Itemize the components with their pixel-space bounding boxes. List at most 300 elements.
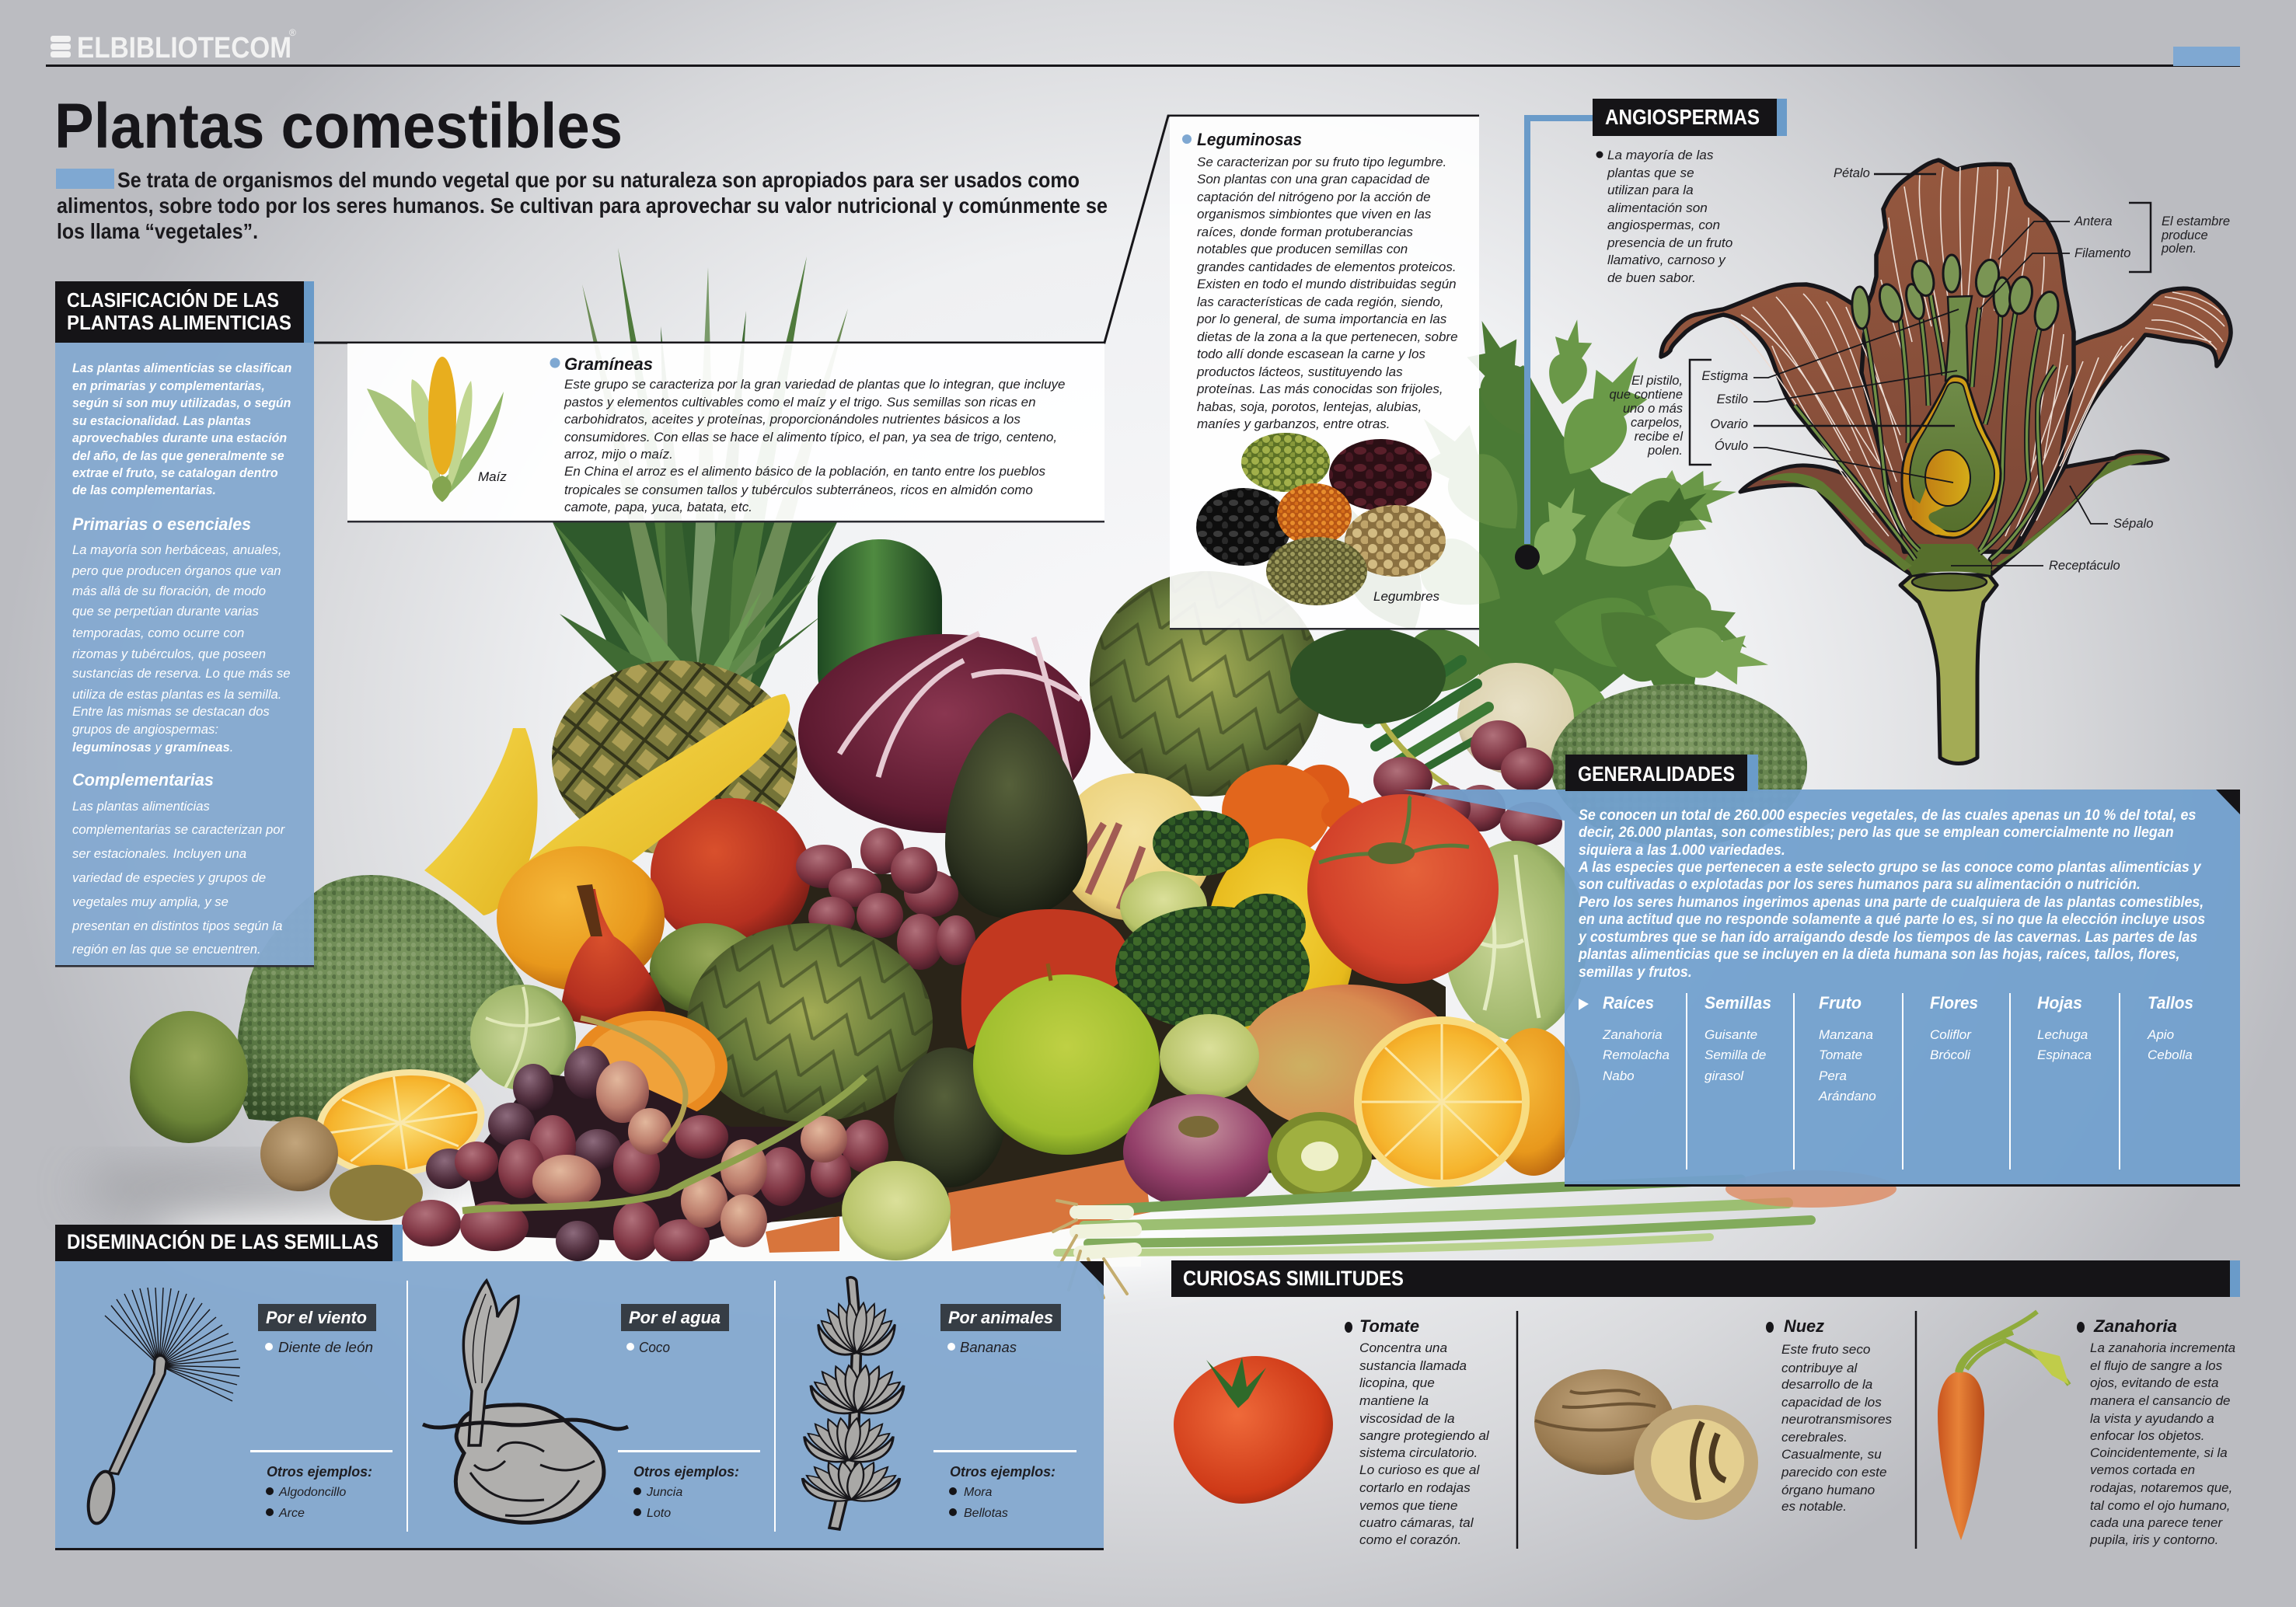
plant parts table: Zanahoria xyxy=(1602,1027,1663,1042)
anthers xyxy=(1851,255,2062,333)
header: angiospermas xyxy=(1593,99,1787,136)
panel: clasificación xyxy=(55,343,314,967)
brackets xyxy=(1690,203,2151,465)
bullet xyxy=(1182,134,1192,144)
tomatillo lower mid xyxy=(1160,1014,1259,1100)
icon: arrow xyxy=(1579,999,1589,1010)
flower labels: Sépalo xyxy=(2113,517,2153,531)
tomatillos upper xyxy=(1120,871,1207,943)
flower labels: recibe el xyxy=(1635,430,1684,444)
receptacle xyxy=(1904,544,1991,575)
flower labels: El estambre xyxy=(2162,214,2230,228)
floor glow xyxy=(78,1163,1244,1290)
angiospermas text: de buen sabor. xyxy=(1607,270,1696,285)
complementarias text: región en las que se encuentren. xyxy=(72,942,261,957)
generalidades text: decir, 26.000 plantas, son comestibles; pero las que se emplean comercialmente no llegan xyxy=(1579,823,2174,840)
pear xyxy=(560,884,667,1029)
leguminosas text: organismos simbiontes que viven en las xyxy=(1197,207,1432,221)
label: por el viento: Por el viento xyxy=(266,1308,367,1327)
leguminosas text: todo allí donde escasean la carne y los xyxy=(1197,347,1425,361)
nuez text: órgano humano xyxy=(1781,1483,1875,1497)
lower grape bunch xyxy=(402,1018,888,1263)
flower labels: Receptáculo xyxy=(2049,559,2120,573)
banana small xyxy=(424,728,538,915)
header: curiosas similitudes xyxy=(1171,1260,2240,1297)
header: angiospermas: ANGIOSPERMAS xyxy=(1605,105,1760,129)
leguminosas text: habas, soja, porotos, lentejas, alubias, xyxy=(1197,399,1422,414)
tomate text: Concentra una xyxy=(1359,1340,1447,1355)
leguminosas text: productos lácteos, sustituyendo las xyxy=(1196,364,1403,379)
generalidades text: A las especies que pertenecen a este selecto grupo se las conoce como plantas alimenticias y xyxy=(1578,858,2202,875)
generalidades text xyxy=(1578,806,2205,980)
plant parts table: Hojas xyxy=(2037,993,2082,1013)
angiospermas connector xyxy=(1515,118,1593,570)
flower labels: uno o más xyxy=(1623,402,1683,416)
item: nuez xyxy=(1534,1316,1893,1520)
walnut xyxy=(260,1117,338,1191)
heading: nuez: Nuez xyxy=(1784,1316,1824,1336)
artichoke centre xyxy=(687,923,933,1122)
flower diagram xyxy=(1609,160,2231,763)
orange slice xyxy=(572,1011,728,1123)
complementarias text: complementarias se caracterizan por xyxy=(72,822,285,837)
celery sticks xyxy=(1348,651,1488,785)
nuez text: Casualmente, su xyxy=(1781,1447,1882,1462)
cucumber xyxy=(818,539,942,734)
walnut xyxy=(1534,1369,1758,1520)
flower labels: polen. xyxy=(1647,444,1683,458)
plant parts table: Nabo xyxy=(1603,1068,1635,1083)
bullet xyxy=(550,357,560,368)
tomatillo bottom xyxy=(842,1161,951,1260)
dark gaps behind pile xyxy=(591,855,1446,1228)
primarias text: grupos de angiospermas: xyxy=(72,722,218,737)
label: por animales: Por animales xyxy=(948,1308,1053,1327)
flower labels: Antera xyxy=(2074,214,2113,228)
primarias text: pero que producen órganos que van xyxy=(72,563,281,578)
plant parts table: Guisante xyxy=(1705,1027,1757,1042)
angiospermas text: presencia de un fruto xyxy=(1607,235,1732,250)
leguminosas text: Son plantas con una gran capacidad de xyxy=(1197,172,1430,186)
primarias text: temporadas, como ocurre con xyxy=(72,626,244,640)
dividers xyxy=(407,1281,775,1532)
tomate text: viscosidad de la xyxy=(1359,1411,1455,1426)
lime left xyxy=(130,1011,248,1143)
heading: complementarias: Complementarias xyxy=(72,770,214,790)
gramíneas text: pastos y elementos cultivables como el maíz y el trigo. Sus semillas son ricas en xyxy=(564,395,1036,410)
mango xyxy=(1239,985,1457,1132)
zanahoria text: rodajas, notaremos que, xyxy=(2090,1480,2232,1495)
icon: sprouting coconut xyxy=(423,1281,628,1522)
tomate text: Lo curioso es que al xyxy=(1359,1462,1480,1477)
left sepal xyxy=(1740,465,1920,575)
corner triangle xyxy=(1080,1261,1104,1286)
flower labels: Ovario xyxy=(1710,417,1748,431)
logo: ELBIBLIOTECOM xyxy=(77,32,291,64)
maize caption: Maíz xyxy=(478,469,507,484)
intro classification text: Las plantas alimenticias se clasifican xyxy=(72,361,291,375)
plant parts table: Fruto xyxy=(1819,993,1862,1013)
bullet: coco xyxy=(626,1340,670,1355)
nuez text: capacidad de los xyxy=(1781,1395,1882,1410)
leguminosas text: por lo general, de suma importancia en las xyxy=(1196,312,1447,326)
tomate text: sangre protegiendo al xyxy=(1359,1428,1490,1443)
intro classification text: de las complementarias. xyxy=(72,483,216,497)
flower labels: Estigma xyxy=(1701,369,1748,383)
leguminosas text: grandes cantidades de elementos proteicos. xyxy=(1197,260,1457,274)
carrot xyxy=(1938,1312,2069,1540)
flower labels: Óvulo xyxy=(1715,438,1748,453)
flower labels: Estilo xyxy=(1717,392,1748,406)
angiospermas text: plantas que se xyxy=(1607,166,1694,180)
intro text: Se trata de organismos del mundo vegetal que por su naturaleza son apropiados para ser usados como xyxy=(117,168,1080,192)
heading: zanahoria: Zanahoria xyxy=(2093,1316,2177,1336)
nuez text: parecido con este xyxy=(1781,1465,1886,1480)
complementarias text: vegetales muy amplia, y se xyxy=(72,894,229,909)
produce photo collage xyxy=(78,248,1896,1298)
gramíneas text: tropicales se consumen tallos y tubérculos subterráneos, ricos en almidón como xyxy=(564,483,1033,497)
zanahoria text: Coincidentemente, si la xyxy=(2090,1445,2228,1460)
header: generalidades: GENERALIDADES xyxy=(1578,762,1735,786)
plant parts table: Apio xyxy=(2147,1027,2174,1042)
plant parts table: Espinaca xyxy=(2037,1048,2092,1062)
header: clasificación: PLANTAS ALIMENTICIAS xyxy=(67,311,291,334)
legumes caption: Legumbres xyxy=(1373,589,1440,604)
otros ejemplos animales: Mora xyxy=(964,1486,993,1499)
ovary xyxy=(1902,376,2001,538)
generalidades text: plantas alimenticias que se incluyen en la dieta humana son las hojas, raíces, tallos, flores, xyxy=(1578,945,2180,962)
otros ejemplos viento: Arce xyxy=(278,1507,305,1520)
leguminosas text: dietas de la zona a la que pertenecen, sobre xyxy=(1197,329,1458,344)
otros ejemplos viento: Algodoncillo xyxy=(278,1486,346,1499)
nuez text: desarrollo de la xyxy=(1781,1377,1872,1392)
kiwi xyxy=(1268,1112,1372,1201)
intro classification text: en primarias y complementarias, xyxy=(72,379,265,393)
flower labels: carpelos, xyxy=(1631,416,1683,430)
avocado top xyxy=(945,713,1087,919)
complementarias text: Las plantas alimenticias xyxy=(72,799,210,814)
complementarias text: presentan en distintos tipos según la xyxy=(72,919,282,933)
leaf mass centre xyxy=(1290,628,1446,724)
plant parts table: Brócoli xyxy=(1930,1048,1971,1062)
red mango xyxy=(651,798,811,950)
leguminosas text xyxy=(1196,155,1458,431)
flower labels: que contiene xyxy=(1609,388,1683,402)
nuez text: cerebrales. xyxy=(1781,1430,1848,1445)
label: por el agua xyxy=(621,1304,729,1331)
leguminosas text: captación del nitrógeno por la acción de xyxy=(1197,190,1431,204)
peach under panel xyxy=(1725,1170,1896,1208)
label: por el viento xyxy=(258,1304,376,1331)
item: tomate xyxy=(1174,1316,1490,1547)
plant parts table: Arándano xyxy=(1818,1089,1876,1103)
orange back xyxy=(497,846,665,991)
header: diseminación: DISEMINACIÓN DE LAS SEMILLAS xyxy=(67,1229,379,1253)
panel: diseminación de las semillas xyxy=(55,1261,1104,1550)
pepino melon xyxy=(1057,773,1213,921)
otros ejemplos agua: Juncia xyxy=(646,1486,682,1499)
corner triangle xyxy=(2216,790,2240,814)
header: curiosas similitudes: CURIOSAS SIMILITUDES xyxy=(1183,1267,1404,1290)
tomate text: como el corazón. xyxy=(1359,1532,1461,1547)
leguminosas text: las características de cada región, siendo, xyxy=(1197,295,1444,309)
generalidades text: son cultivadas o explotadas por los seres humanos para su alimentación o nutrición. xyxy=(1579,875,2141,892)
leguminosas text: raíces, donde forman protuberancias xyxy=(1197,225,1413,239)
plant parts table: girasol xyxy=(1705,1068,1744,1083)
back orange right xyxy=(1487,1028,1580,1176)
generalidades text: siquiera a las 1.000 variedades. xyxy=(1579,841,1785,858)
collar xyxy=(1912,573,1987,591)
right petal xyxy=(2013,288,2231,556)
flower labels: Pétalo xyxy=(1834,166,1870,180)
zanahoria text: enfocar los objetos. xyxy=(2090,1428,2204,1443)
intro classification text: según si son muy utilizadas, o según xyxy=(72,396,291,410)
zanahoria text: cada una parece tener xyxy=(2090,1515,2223,1530)
bullet: coco: Coco xyxy=(639,1340,670,1355)
generalidades text: semillas y frutos. xyxy=(1579,963,1692,980)
nuez text: Este fruto seco xyxy=(1781,1342,1870,1357)
intro classification text: del año, de las que generalmente se xyxy=(72,449,284,463)
leguminosas text: proteínas. Las más conocidas son frijoles, xyxy=(1196,382,1443,396)
artichoke large xyxy=(1090,571,1323,797)
otros ejemplos viento: Otros ejemplos: xyxy=(267,1464,372,1480)
plant parts table: Lechuga xyxy=(2037,1027,2088,1042)
yellow pepper xyxy=(1206,838,1354,1048)
tomate text: sustancia llamada xyxy=(1359,1358,1467,1373)
header: clasificación: CLASIFICACIÓN DE LAS xyxy=(67,288,279,312)
primarias text: La mayoría son herbáceas, anuales, xyxy=(72,542,281,557)
tomate text: mantiene la xyxy=(1359,1393,1429,1408)
pineapple body xyxy=(552,661,797,855)
leguminosas text: Se caracterizan por su fruto tipo legumbre. xyxy=(1197,155,1446,169)
header: generalidades xyxy=(1565,755,1758,791)
ovule xyxy=(1912,450,1970,535)
plant parts table: Semillas xyxy=(1705,993,1771,1013)
apple xyxy=(973,964,1160,1155)
gramíneas text: camote, papa, yuca, batata, etc. xyxy=(564,500,752,514)
generalidades text: en una actitud que no responde solamente a qué parte lo es, si no que la elección incluye usos xyxy=(1579,910,2205,927)
angiospermas text: angiospermas, con xyxy=(1607,218,1720,232)
plant parts table: Tallos xyxy=(2148,993,2193,1013)
leguminosas text: notables que producen semillas con xyxy=(1197,242,1408,256)
primarias text: leguminosas y gramíneas. xyxy=(72,740,233,755)
gramíneas text: Este grupo se caracteriza por la gran variedad de plantas que lo integran, que incluye xyxy=(564,377,1066,392)
primarias text: sustancias de reserva. Lo que más se xyxy=(72,666,291,681)
panel: gramíneas xyxy=(347,343,1104,522)
primarias text: más allá de su floración, de modo xyxy=(72,584,266,598)
header rule xyxy=(46,64,2240,67)
broccoli main xyxy=(236,875,529,1122)
icon: banana bunch xyxy=(802,1278,905,1529)
legumes picture xyxy=(1196,433,1446,605)
intro classification text: su estacionalidad. Las plantas xyxy=(72,414,251,428)
heading: tomate: Tomate xyxy=(1359,1316,1419,1336)
title: Plantas comestibles xyxy=(54,91,623,162)
otros ejemplos animales: Otros ejemplos: xyxy=(950,1464,1056,1480)
leguminosas text: Existen en todo el mundo distribuidas según xyxy=(1197,277,1457,291)
generalidades text: Pero los seres humanos ingerimos apenas una parte de cualquiera de las plantas comestibles, xyxy=(1579,893,2204,910)
orange tomatoes xyxy=(1222,765,1368,858)
intro classification text: extrae el fruto, se catalogan dentro xyxy=(72,466,278,480)
primarias text: rizomas y tubérculos, que poseen xyxy=(72,647,266,661)
generalidades text: Se conocen un total de 260.000 especies vegetales, de las cuales apenas un 10 % del total, es xyxy=(1579,806,2196,823)
otros ejemplos agua: Otros ejemplos: xyxy=(633,1464,739,1480)
zanahoria text: tal como el ojo humano, xyxy=(2090,1498,2231,1513)
primarias text xyxy=(72,542,291,755)
primarias text: Entre las mismas se destacan dos xyxy=(72,704,270,719)
stem xyxy=(1900,575,1997,763)
pineapple crown xyxy=(553,248,848,699)
flower labels: Filamento xyxy=(2074,246,2130,260)
zanahoria text: La zanahoria incrementa xyxy=(2090,1340,2235,1355)
tomate text: cortarlo en rodajas xyxy=(1359,1480,1471,1495)
plant parts table: Cebolla xyxy=(2148,1048,2193,1062)
otros ejemplos animales xyxy=(949,1464,1056,1520)
logo: ® xyxy=(289,27,296,38)
broccoli right xyxy=(1551,684,1807,847)
left petal xyxy=(1661,284,1916,561)
tomate text: licopina, que xyxy=(1359,1375,1435,1390)
gramíneas text: consumidores. Con ellas se hace el alimento típico, el pan, ya sea de trigo, centeno, xyxy=(564,430,1057,444)
tomate text xyxy=(1359,1340,1490,1547)
leguminosas text: maníes y garbanzos, entre otras. xyxy=(1197,417,1391,431)
leader lines xyxy=(1753,174,2108,566)
brussels sprout xyxy=(470,985,576,1090)
plant parts table: Pera xyxy=(1819,1068,1847,1083)
zanahoria text: manera el cansancio de xyxy=(2090,1393,2231,1408)
orange half right xyxy=(1354,1016,1530,1187)
tomate text: sistema circulatorio. xyxy=(1359,1445,1478,1460)
icon: dandelion xyxy=(84,1288,240,1525)
right grapes xyxy=(1373,720,1562,845)
right sepal xyxy=(1990,451,2168,575)
zanahoria text: ojos, evitando de esta xyxy=(2090,1375,2218,1390)
tomate text: cuatro cámaras, tal xyxy=(1359,1515,1474,1530)
petal veins xyxy=(1729,167,2224,544)
plant parts table: Tomate xyxy=(1819,1048,1862,1062)
primarias text: que se perpetúan durante varias xyxy=(72,604,259,619)
parsley and celery leaves xyxy=(1306,312,1773,794)
plant parts table: Semilla de xyxy=(1705,1048,1766,1062)
intro text: alimentos, sobre todo por los seres humanos. Se cultivan para aprovechar su valor nutricional y comúnmente se xyxy=(57,193,1108,218)
nuez text: contribuye al xyxy=(1781,1361,1858,1375)
complementarias text xyxy=(72,799,285,957)
dividers xyxy=(1517,1311,1916,1549)
zanahoria text: vemos cortada en xyxy=(2090,1462,2195,1477)
generalidades text: y costumbres que se han ido arraigando desde los tiempos de las cavernas. Las partes de las xyxy=(1578,928,2197,945)
zanahoria text: pupila, iris y contorno. xyxy=(2089,1532,2218,1547)
intro text xyxy=(56,168,1108,243)
gramíneas text: arroz, mijo o maíz. xyxy=(564,447,673,462)
bullet: bananas: Bananas xyxy=(960,1340,1017,1355)
parsley clumps xyxy=(1115,810,1310,1030)
flower labels: produce xyxy=(2161,228,2208,242)
angiospermas text: llamativo, carnoso y xyxy=(1607,253,1726,267)
heading: leguminosas: Leguminosas xyxy=(1197,130,1302,149)
label: por el agua: Por el agua xyxy=(629,1308,721,1327)
gramíneas text xyxy=(564,377,1066,514)
upper grapes xyxy=(796,828,975,970)
carrot xyxy=(948,1156,1150,1251)
sepal green bands xyxy=(1761,455,2165,571)
intro text: los llama “vegetales”. xyxy=(57,219,258,243)
flower labels: El pistilo, xyxy=(1631,374,1683,388)
intro classification text xyxy=(72,361,291,497)
heading: primarias: Primarias o esenciales xyxy=(72,514,251,534)
item: zanahoria xyxy=(1938,1312,2235,1547)
nuez text: es notable. xyxy=(1781,1499,1847,1514)
red pepper xyxy=(961,909,1131,1049)
melon xyxy=(1457,663,1574,775)
flower labels xyxy=(1609,166,2230,573)
gramíneas text: En China el arroz es el alimento básico de la población, en tanto entre los pueblos xyxy=(564,464,1045,479)
avocado lower xyxy=(894,1048,1006,1187)
kiwi left xyxy=(330,1165,423,1221)
otros ejemplos agua: Loto xyxy=(647,1507,671,1520)
tomate text: vemos que tiene xyxy=(1359,1498,1457,1513)
central petal xyxy=(1862,160,2074,552)
zanahoria text: la vista y ayudando a xyxy=(2090,1411,2214,1426)
plant parts table xyxy=(1602,993,2193,1170)
radicchio xyxy=(798,633,1090,833)
plant parts table: Flores xyxy=(1930,993,1978,1013)
header: diseminación xyxy=(55,1225,403,1261)
intro classification text: aprovechables durante una estación xyxy=(72,431,287,445)
small carrot xyxy=(766,1216,839,1253)
icon: maize xyxy=(367,357,504,502)
header: clasificación xyxy=(55,281,314,343)
otros ejemplos animales: Bellotas xyxy=(964,1507,1008,1520)
plant parts table: Coliflor xyxy=(1930,1027,1972,1042)
onions xyxy=(1053,1180,1811,1298)
nuez text xyxy=(1781,1342,1893,1514)
banana large xyxy=(525,694,790,870)
panel: leguminosas xyxy=(1170,117,1479,629)
tomato xyxy=(1174,1356,1333,1504)
half lemon xyxy=(309,1058,491,1187)
panel: generalidades xyxy=(1403,790,2240,1187)
angiospermas text xyxy=(1596,148,1732,285)
style and stigma xyxy=(1945,296,1972,381)
big tomato xyxy=(1307,794,1499,984)
turnip xyxy=(1123,1094,1274,1209)
label: por animales xyxy=(940,1304,1061,1331)
gramíneas text: carbohidratos, aceites y proteínas, proporcionándoles nutrientes básicos a los xyxy=(564,412,1021,427)
primarias text: utiliza de estas plantas es la semilla. xyxy=(72,687,281,702)
filaments xyxy=(1795,295,2055,559)
nuez text: neurotransmisores xyxy=(1781,1412,1893,1427)
bullet: diente de león: Diente de león xyxy=(278,1340,373,1355)
angiospermas text: alimentación son xyxy=(1607,200,1708,215)
plant parts table: Manzana xyxy=(1819,1027,1873,1042)
heading: gramíneas: Gramíneas xyxy=(564,354,653,374)
complementarias text: ser estacionales. Incluyen una xyxy=(72,846,246,861)
plant parts table: Remolacha xyxy=(1603,1048,1670,1062)
zanahoria text: el flujo de sangre a los xyxy=(2090,1358,2223,1373)
savoy cabbage xyxy=(1444,841,1587,1040)
connector line to leguminosas xyxy=(314,116,1479,343)
otros ejemplos agua xyxy=(633,1464,739,1520)
complementarias text: variedad de especies y grupos de xyxy=(72,870,266,885)
lime behind xyxy=(650,923,762,1013)
flower labels: polen. xyxy=(2161,242,2197,256)
header blue tab xyxy=(2173,47,2240,66)
plant parts table: Raíces xyxy=(1603,993,1654,1013)
zanahoria text xyxy=(2089,1340,2235,1547)
angiospermas text: utilizan para la xyxy=(1607,183,1694,197)
otros ejemplos viento xyxy=(266,1464,372,1520)
angiospermas text: La mayoría de las xyxy=(1607,148,1714,162)
